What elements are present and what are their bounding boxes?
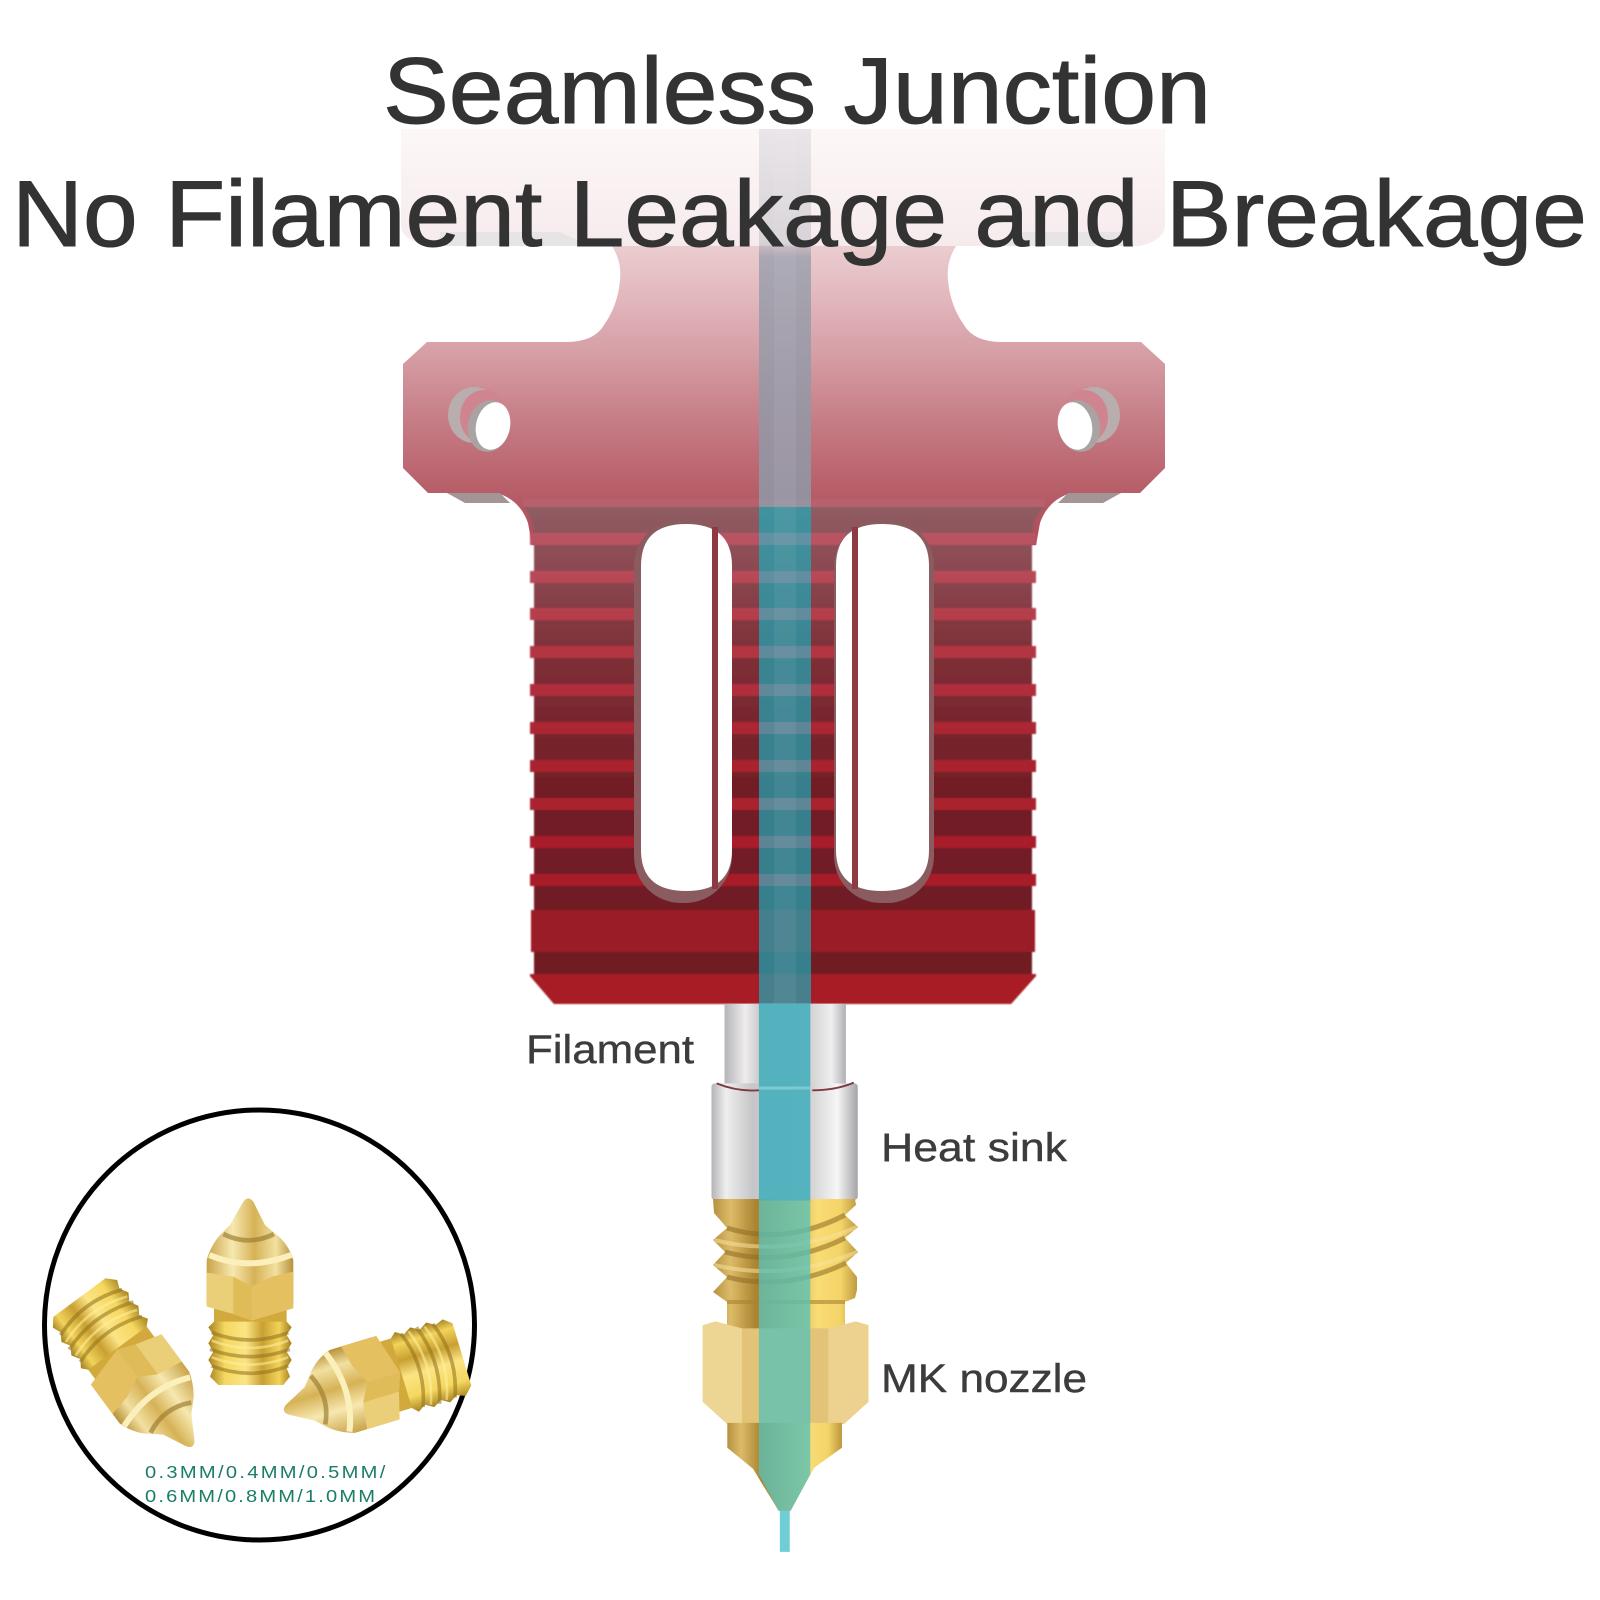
label: MK nozzle: MK nozzle <box>881 1357 1087 1401</box>
icon: brass nozzles <box>45 1198 475 1473</box>
title: Seamless Junction <box>383 38 1211 143</box>
filament channel through heat block <box>759 129 811 1004</box>
title <box>12 38 1587 266</box>
nozzle size text <box>145 1462 386 1506</box>
left cooling slot <box>634 519 732 903</box>
callout: nozzle sizes circle <box>44 1110 475 1540</box>
hex nut <box>703 1321 868 1424</box>
nozzle size text: 0.6MM/0.8MM/1.0MM <box>145 1486 375 1506</box>
panel: heat block mounting plate <box>403 246 1165 545</box>
brass thread <box>713 1199 858 1330</box>
upper sleeve <box>725 1004 846 1088</box>
filament <box>759 1004 810 1552</box>
hot end assembly: sleeve, heat sink, MK nozzle and filament <box>703 1004 868 1552</box>
nozzle size text: 0.3MM/0.4MM/0.5MM/ <box>145 1462 386 1482</box>
nozzle tip <box>727 1423 842 1511</box>
icon: left mounting hole <box>448 387 515 456</box>
panel: finned heat sink body <box>523 499 1045 1004</box>
label: Heat sink: Heat sink <box>881 1126 1068 1170</box>
panel: heat block faded top section <box>401 129 1165 246</box>
label: Filament: Filament <box>526 1028 694 1072</box>
icon: right mounting hole <box>1053 387 1120 456</box>
title: No Filament Leakage and Breakage <box>12 161 1587 266</box>
heat sink cylinder <box>711 1083 858 1200</box>
right cooling slot <box>834 519 934 903</box>
